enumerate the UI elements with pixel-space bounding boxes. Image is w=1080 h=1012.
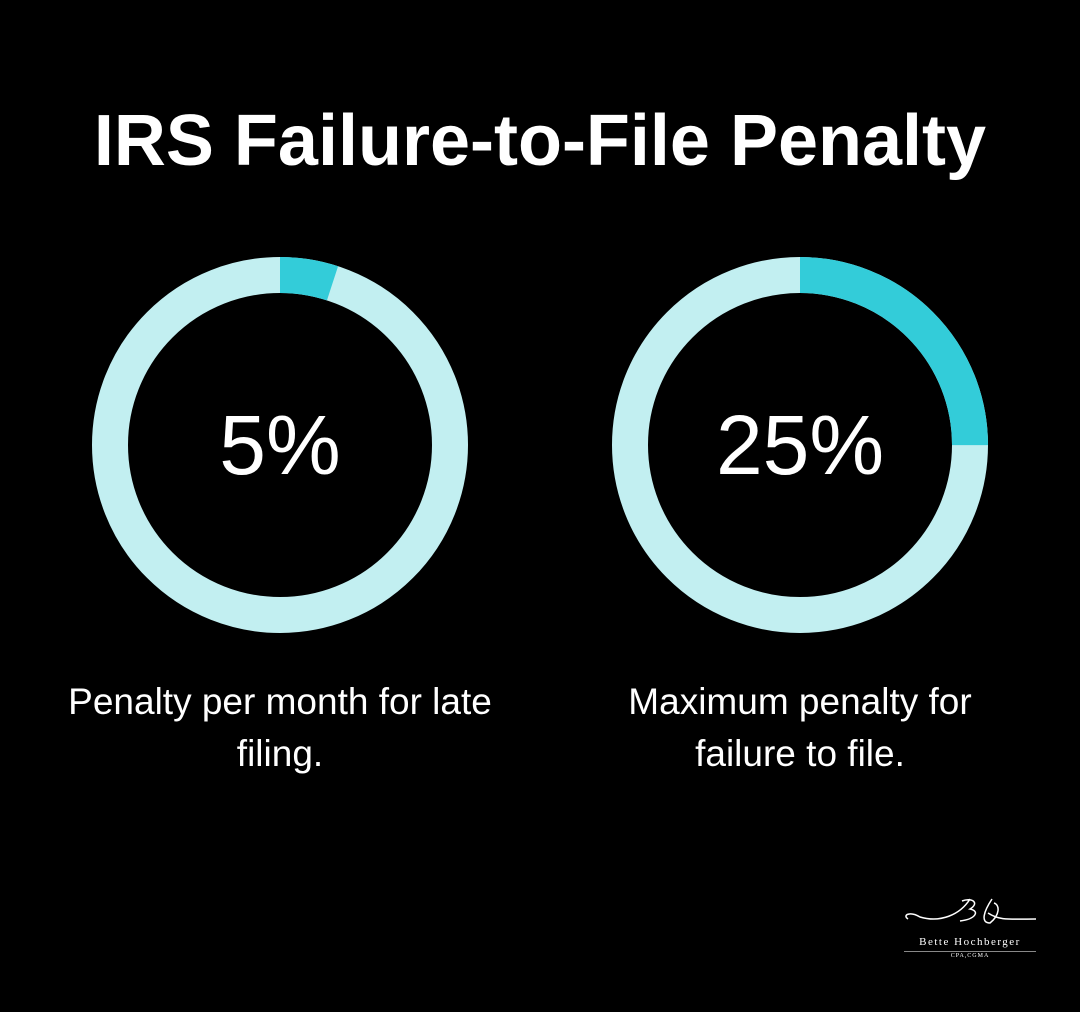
stat: 5%: 5%	[219, 398, 341, 492]
chart: donut 25%	[612, 257, 988, 633]
logo	[904, 898, 1036, 959]
logo: Bette Hochberger	[919, 936, 1021, 948]
label: right: Maximum penalty for failure to file.	[628, 681, 972, 774]
label: left: Penalty per month for late filing.	[68, 681, 492, 774]
logo: CPA,CGMA	[951, 953, 989, 959]
stat: 25%: 25%	[716, 398, 884, 492]
title: IRS Failure-to-File Penalty	[94, 101, 986, 181]
chart: donut 5%	[92, 257, 468, 633]
